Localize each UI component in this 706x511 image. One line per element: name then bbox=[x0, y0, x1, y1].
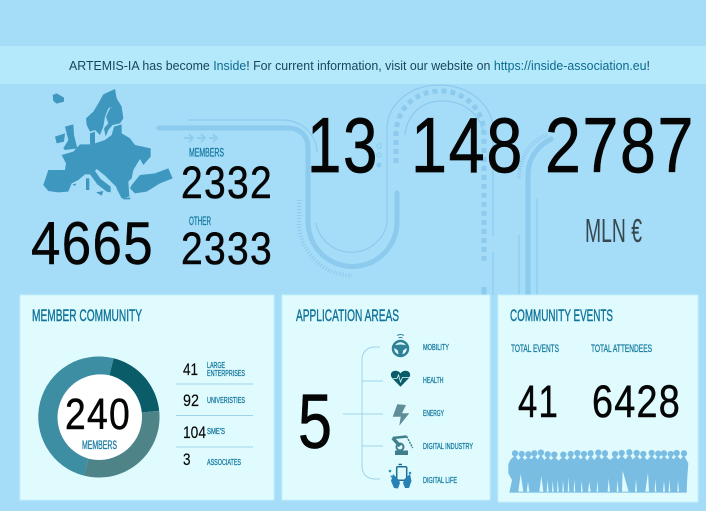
heading: member community: MEMBER COMMUNITY bbox=[32, 307, 142, 325]
label: mobility: MOBILITY bbox=[423, 342, 449, 352]
donut total: 240 bbox=[65, 390, 131, 439]
stat: 13: 13 bbox=[307, 101, 379, 189]
donut label: MEMBERS bbox=[82, 440, 117, 452]
stat: attendees: 6428 bbox=[592, 376, 681, 427]
icon: steering wheel bbox=[393, 334, 408, 356]
icon: heart bbox=[391, 371, 411, 387]
tree connector bbox=[343, 347, 383, 479]
stat: events: 41 bbox=[518, 376, 559, 427]
label: other: OTHER bbox=[189, 214, 211, 228]
notice banner: ARTEMIS-IA has become Inside! For current information, visit our website on https://inside-association.eu! bbox=[69, 58, 650, 73]
member breakdown list: UNIVERISTIES bbox=[207, 395, 245, 405]
panel: community events bbox=[498, 295, 698, 502]
heading: application areas: APPLICATION AREAS bbox=[296, 307, 399, 325]
member breakdown list: 92 bbox=[183, 392, 199, 410]
member breakdown list: 41 bbox=[183, 361, 198, 379]
label: MLN euro: MLN € bbox=[585, 212, 642, 249]
stat: other 2333: 2333 bbox=[181, 223, 273, 274]
member breakdown list: 104 bbox=[183, 424, 206, 442]
notice banner bbox=[0, 46, 706, 84]
member breakdown list: ASSOCIATES bbox=[207, 457, 241, 467]
arrows bbox=[184, 134, 217, 142]
heading: community events: COMMUNITY EVENTS bbox=[510, 307, 613, 325]
label: digital industry: DIGITAL INDUSTRY bbox=[423, 441, 473, 451]
stat: 5: 5 bbox=[298, 379, 332, 465]
panel: application areas bbox=[282, 295, 490, 500]
donut chart bbox=[38, 356, 160, 478]
label: total events: TOTAL EVENTS bbox=[511, 343, 559, 355]
member breakdown list: LARGE bbox=[207, 360, 225, 370]
label: members: MEMBERS bbox=[189, 146, 224, 160]
label: health: HEALTH bbox=[423, 375, 444, 385]
stat: members 2332: 2332 bbox=[181, 157, 273, 208]
icon: lightning bolt bbox=[393, 404, 409, 426]
stat: total 4665: 4665 bbox=[31, 210, 154, 277]
member breakdown list bbox=[176, 360, 253, 469]
label: digital life: DIGITAL LIFE bbox=[423, 475, 457, 485]
crowd silhouette bbox=[508, 449, 688, 493]
label: total attendees: TOTAL ATTENDEES bbox=[591, 343, 652, 355]
panel: member community bbox=[20, 295, 274, 500]
member breakdown list: 3 bbox=[183, 451, 190, 469]
member breakdown list: ENTERPRISES bbox=[207, 368, 245, 378]
member breakdown list: SME'S bbox=[207, 426, 225, 436]
icon: Europe map bbox=[43, 89, 173, 199]
label: energy: ENERGY bbox=[423, 408, 444, 418]
stat: 148: 148 bbox=[411, 101, 524, 189]
icon: robot arm bbox=[393, 436, 413, 455]
icon: tablet in hands bbox=[389, 464, 412, 488]
